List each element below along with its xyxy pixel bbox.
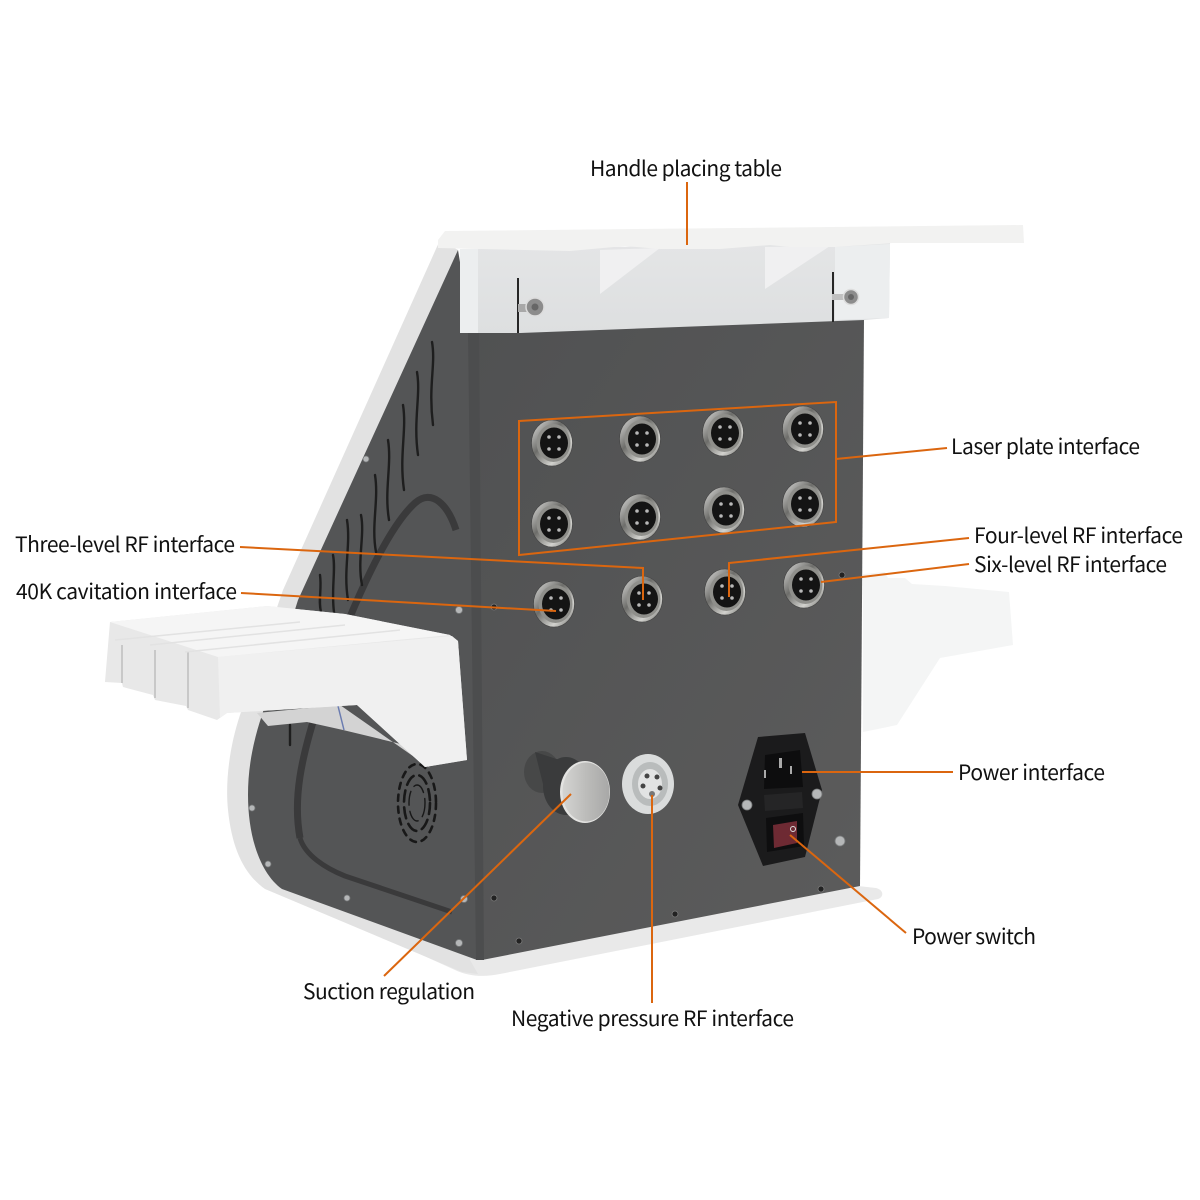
label: four-level RF interface: Four-level RF interface	[974, 520, 1183, 550]
recess lower edge	[300, 838, 452, 912]
leader: negative pressure RF	[651, 795, 653, 1003]
panel edge strip	[468, 333, 484, 960]
leader: four-level RF	[729, 538, 969, 597]
table top	[438, 225, 1024, 251]
label: laser plate interface: Laser plate interface	[951, 431, 1140, 461]
leader: three-level RF	[240, 547, 643, 600]
power module	[738, 733, 822, 866]
label: three-level RF interface: Three-level RF interface	[15, 529, 235, 559]
leader: power switch	[790, 835, 906, 933]
leader: laser plate interface	[836, 448, 947, 459]
main rear panel	[470, 318, 864, 960]
screw right	[832, 290, 858, 304]
label: power interface: Power interface	[958, 757, 1105, 787]
table brackets	[460, 243, 890, 333]
label: 40K cavitation interface: 40K cavitation interface	[16, 576, 237, 606]
base plate	[400, 886, 882, 976]
left shelf	[105, 606, 467, 768]
power inlet	[764, 750, 803, 789]
connector group: laser plate	[532, 406, 824, 547]
label: suction regulation: Suction regulation	[303, 976, 475, 1006]
bracket shading	[600, 246, 830, 294]
handle placing table	[438, 225, 1024, 333]
right shelf (background)	[863, 572, 1013, 732]
panel holes	[491, 572, 845, 944]
leader: suction regulation	[384, 794, 571, 976]
leader: six-level RF	[821, 564, 969, 582]
side recess	[297, 497, 456, 838]
label: power switch: Power switch	[912, 921, 1036, 951]
leader: power interface	[802, 771, 953, 773]
rocker switch	[766, 813, 804, 852]
side panel	[248, 250, 482, 960]
machine body	[105, 240, 1013, 976]
module screws	[742, 800, 752, 810]
side shell rim	[227, 240, 478, 974]
vent	[398, 764, 436, 842]
fuse holder	[764, 792, 803, 811]
suction regulation knob	[524, 751, 610, 823]
connector group: RF and cavitation	[534, 562, 824, 627]
label: handle placing table: Handle placing table	[590, 153, 782, 183]
label: six-level RF interface: Six-level RF interface	[974, 549, 1167, 579]
leader: 40K cavitation	[241, 593, 556, 611]
label: negative pressure RF interface: Negative pressure RF interface	[511, 1003, 794, 1033]
laser plate box	[519, 402, 836, 555]
side screws	[249, 456, 468, 946]
side slots	[290, 342, 433, 745]
leader: handle placing table	[686, 182, 688, 245]
negative pressure socket	[622, 754, 674, 814]
screw left	[518, 298, 544, 316]
